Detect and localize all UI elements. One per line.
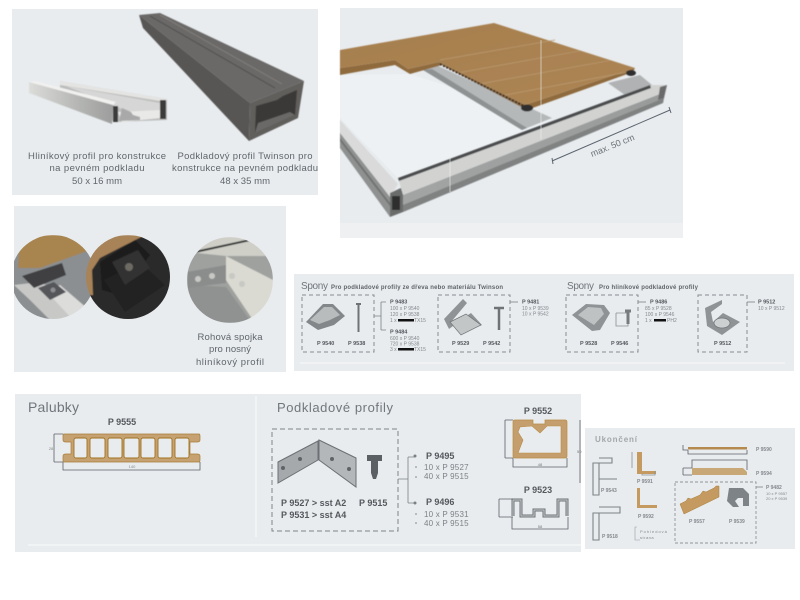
group: P 9529 and P 9542: P 9529 [452, 341, 469, 347]
panel: clips [294, 274, 794, 371]
kit list: P 9481: P 9481 [522, 300, 539, 306]
kit list: P 9512 [747, 300, 785, 312]
deck board section [49, 434, 200, 470]
circle: corner connector [187, 235, 273, 323]
group: brackets and screw: P 9531 > sst A4 [281, 510, 346, 520]
kit list: P 9482: 10 x P 9557 [766, 491, 788, 496]
kit list: P 9483 and P 9484: P 9483 [390, 300, 407, 306]
profile P 9552: 50 [577, 449, 582, 454]
profile P 9592: P 9592 [638, 514, 654, 520]
group: brackets and screw: P 9527 > sst A2 [281, 498, 346, 508]
caption: corner connector [196, 332, 264, 368]
kit list: P 9483 and P 9484: TX15 [414, 347, 426, 353]
kit list: P 9486: P 9486 [650, 300, 667, 306]
heading: clips for aluminium: Spony [567, 281, 594, 292]
group: brackets and screw: P 9515 [359, 498, 387, 508]
clips [521, 104, 533, 112]
profile P 9552: P 9552 [524, 406, 552, 416]
profile P 9591 [632, 452, 656, 485]
caption: Twinson profile [172, 151, 318, 187]
group: P 9528 and P 9546: P 9528 [580, 341, 597, 347]
kit list: P 9486: PH2 [667, 318, 677, 324]
caption: aluminium profile: Hliníkový profil pro konstrukce [28, 151, 166, 162]
circle: clip close-up [85, 235, 175, 320]
profile P 9523: P 9523 [524, 485, 552, 495]
group: P 9540 and P 9538 [302, 295, 374, 352]
note: visible side [635, 527, 668, 540]
profile P 9592 [637, 488, 657, 520]
profile P 9552: 48 [538, 462, 543, 467]
front beam [398, 85, 667, 195]
kit list: P 9495 and P 9496: 10 x P 9531 [424, 510, 469, 519]
middle beam [423, 65, 552, 130]
dark support profile [139, 13, 304, 141]
kit list: P 9495 and P 9496: P 9495 [426, 451, 454, 461]
note: visible side: strana [640, 535, 654, 540]
heading: Podkladové profily: Podkladové profily [277, 400, 394, 415]
kit list: P 9482: P 9482 [766, 485, 782, 491]
aluminium profile [29, 81, 167, 124]
group: P 9512 [698, 295, 747, 352]
profile P 9518 [593, 507, 620, 540]
kit list: P 9483 and P 9484: 600 x P 9540 [390, 336, 420, 342]
panel: deck structure [340, 8, 683, 238]
deck board section: 28 [49, 446, 54, 451]
heading: Ukončení: Ukončení [595, 435, 638, 444]
heading: clips for wood and Twinson [301, 281, 503, 292]
group: P 9528 and P 9546: P 9546 [611, 341, 628, 347]
group: P 9557 and P 9539 [675, 482, 756, 543]
caption: Twinson profile: konstrukce na pevném podkladu [172, 163, 318, 174]
profile P 9594: P 9594 [756, 471, 772, 477]
kit list: P 9483 and P 9484: 100 x P 9540 [390, 306, 420, 312]
kit list: P 9495 and P 9496: 10 x P 9527 [424, 463, 469, 472]
profile P 9543: P 9543 [601, 488, 617, 494]
profile P 9591: P 9591 [637, 479, 653, 485]
kit list: P 9483 and P 9484: 120 x P 9538 [390, 312, 420, 318]
kit list: P 9495 and P 9496: 40 x P 9515 [424, 472, 469, 481]
group: P 9529 and P 9542: P 9542 [483, 341, 500, 347]
caption: aluminium profile [28, 151, 166, 187]
kit list: P 9483 and P 9484: P 9484 [390, 330, 408, 336]
group: brackets and screw [272, 429, 398, 531]
group: P 9557 and P 9539: P 9539 [729, 519, 745, 525]
heading: clips for wood and Twinson: Pro podkladové profily ze dřeva nebo materiálu Twinson [331, 285, 503, 291]
panel: decking and support profiles [15, 394, 582, 552]
dimension: max. 50 cm: max. 50 cm [589, 132, 636, 159]
dimension: max. 50 cm [552, 107, 671, 164]
deck board [340, 60, 635, 110]
group: P 9528 and P 9546 [566, 295, 638, 352]
caption: corner connector: pro nosný [209, 344, 251, 355]
caption: aluminium profile: na pevném podkladu [50, 163, 144, 174]
kit list: P 9481: 10 x P 9539 [522, 306, 549, 312]
heading: clips for aluminium: Pro hliníkové podkladové profily [599, 285, 699, 291]
group: P 9512: P 9512 [714, 341, 731, 347]
group: P 9557 and P 9539: P 9557 [689, 519, 705, 525]
group: P 9540 and P 9538: P 9538 [348, 341, 365, 347]
kit list: P 9483 and P 9484: 1 x [390, 318, 397, 324]
caption: aluminium profile: 50 x 16 mm [72, 176, 122, 187]
profile P 9523: 58 [538, 524, 543, 529]
profile P 9518: P 9518 [602, 534, 618, 540]
group: P 9540 and P 9538: P 9540 [317, 341, 334, 347]
kit list: P 9482 [756, 485, 788, 501]
circle: clip detail [14, 235, 90, 319]
kit list: P 9486: 100 x P 9546 [645, 312, 675, 318]
profile P 9552 [505, 406, 582, 483]
kit list: P 9486: 1 x [645, 318, 652, 324]
caption: corner connector: Rohová spojka [198, 332, 263, 343]
profile P 9590 [683, 445, 772, 454]
kit list: P 9512: 10 x P 9512 [758, 306, 785, 312]
caption: Twinson profile: 48 x 35 mm [220, 176, 270, 187]
right beam [608, 75, 652, 95]
kit list: P 9483 and P 9484 [374, 300, 426, 353]
kit list: P 9483 and P 9484: 3 x [390, 347, 397, 353]
profile P 9590: P 9590 [756, 447, 772, 453]
deck board section: 140 [129, 464, 136, 469]
profile P 9594 [683, 460, 772, 477]
kit list: P 9483 and P 9484: TX15 [414, 318, 426, 324]
profile P 9543 [593, 458, 617, 495]
kit list: P 9481 [510, 300, 549, 318]
kit list: P 9512: P 9512 [758, 300, 775, 306]
panel: profiles [12, 9, 318, 195]
left beam [340, 120, 398, 197]
kit list: P 9495 and P 9496: 40 x P 9515 [424, 519, 469, 528]
kit list: P 9486: 85 x P 9528 [645, 306, 672, 312]
kit list: P 9495 and P 9496: P 9496 [426, 497, 454, 507]
panel: finishing [585, 428, 795, 549]
panel: detail circles [10, 206, 286, 372]
kit list: P 9495 and P 9496 [398, 451, 469, 528]
profile P 9523 [499, 485, 568, 529]
heading: Palubky: Palubky [28, 399, 79, 415]
group: P 9529 and P 9542 [438, 295, 510, 352]
kit list: P 9486 [638, 300, 677, 324]
kit list: P 9481: 10 x P 9542 [522, 312, 549, 318]
caption: corner connector: hliníkový profil [196, 357, 264, 368]
caption: Twinson profile: Podkladový profil Twinson pro [178, 151, 312, 162]
label: P 9555: P 9555 [108, 417, 136, 427]
heading: clips for aluminium [567, 281, 699, 292]
kit list: P 9482: 20 x P 9539 [766, 496, 788, 501]
note: visible side: Pohledová [640, 529, 668, 534]
kit list: P 9483 and P 9484: 720 x P 9538 [390, 342, 420, 348]
heading: clips for wood and Twinson: Spony [301, 281, 328, 292]
